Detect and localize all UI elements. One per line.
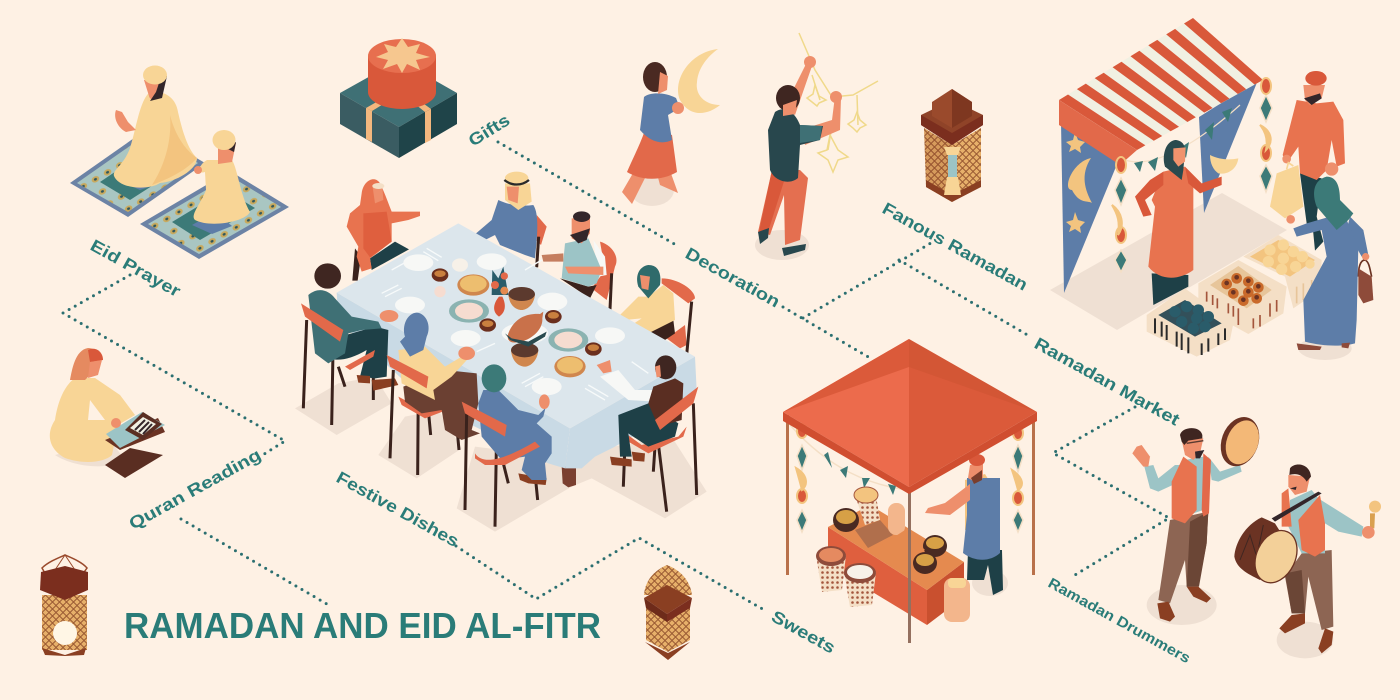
- label: Ramadan Drummers: Ramadan Drummers: [1045, 576, 1193, 667]
- icon: drummer with drum: [1234, 465, 1381, 658]
- place settings and food: [395, 253, 625, 395]
- market woman customer: [1286, 177, 1373, 360]
- icon: lantern bottom left: [40, 555, 88, 656]
- label: Sweets: Sweets: [768, 607, 838, 657]
- icon: lantern bottom center: [644, 565, 692, 660]
- label: Ramadan Market: Ramadan Market: [1031, 334, 1183, 430]
- market figures and crates traced: [1135, 71, 1373, 360]
- icon: gift box with round box: [340, 38, 457, 158]
- connector: Gifts to Decoration: [498, 142, 676, 245]
- label: Festive Dishes: Festive Dishes: [333, 468, 462, 551]
- connector: Fanous to Ramadan Market: [899, 260, 1031, 337]
- icon: man hanging star decorations: [755, 33, 878, 260]
- label: Eid Prayer: Eid Prayer: [87, 236, 184, 301]
- person: bearded man in vest: [542, 211, 616, 309]
- connector: Market to Drummers: [1053, 407, 1169, 578]
- crate: oranges: [1198, 260, 1287, 334]
- icon: man reading Quran: [50, 348, 165, 478]
- crate: apricots: [1243, 235, 1322, 308]
- icon: fanous lantern: [921, 89, 983, 202]
- label: Gifts: Gifts: [465, 110, 513, 150]
- icon: girl holding crescent moon: [622, 49, 720, 206]
- crate: dark fruit: [1147, 288, 1233, 357]
- person: man in teal on left: [301, 263, 398, 425]
- person: man in blue with headdress: [453, 172, 547, 267]
- person: woman with teal head covering: [462, 364, 552, 527]
- festive dinner table with family: [295, 172, 707, 532]
- connector: Quran Reading to title: [181, 519, 332, 607]
- table floor shadows: [295, 377, 707, 532]
- connector: Eid Prayer to Quran Reading: [63, 275, 285, 456]
- market woman seller: [1135, 140, 1238, 305]
- person: woman in orange: [347, 179, 420, 281]
- tablecloth: [337, 223, 697, 468]
- icon: drummer with tambourine: [1132, 412, 1266, 625]
- icon: Eid prayer scene: [70, 66, 289, 259]
- connector: Festive Dishes to Sweets: [456, 538, 766, 611]
- icon: sweets stall with seller: [783, 339, 1037, 643]
- label: Quran Reading: Quran Reading: [126, 445, 264, 533]
- label: Decoration: Decoration: [682, 244, 783, 311]
- market man seller: [1270, 71, 1345, 251]
- person: boy in vest: [597, 355, 698, 512]
- label: Fanous Ramadan: Fanous Ramadan: [879, 199, 1031, 295]
- icon: Ramadan market stall: [1050, 18, 1373, 360]
- table leg: [562, 467, 576, 487]
- title: RAMADAN AND EID AL-FITR: [124, 605, 601, 646]
- person: woman in yellow with teal hijab: [615, 265, 695, 355]
- person: woman with blue hijab: [387, 313, 480, 475]
- connector: Decoration to stall and Fanous: [783, 243, 931, 358]
